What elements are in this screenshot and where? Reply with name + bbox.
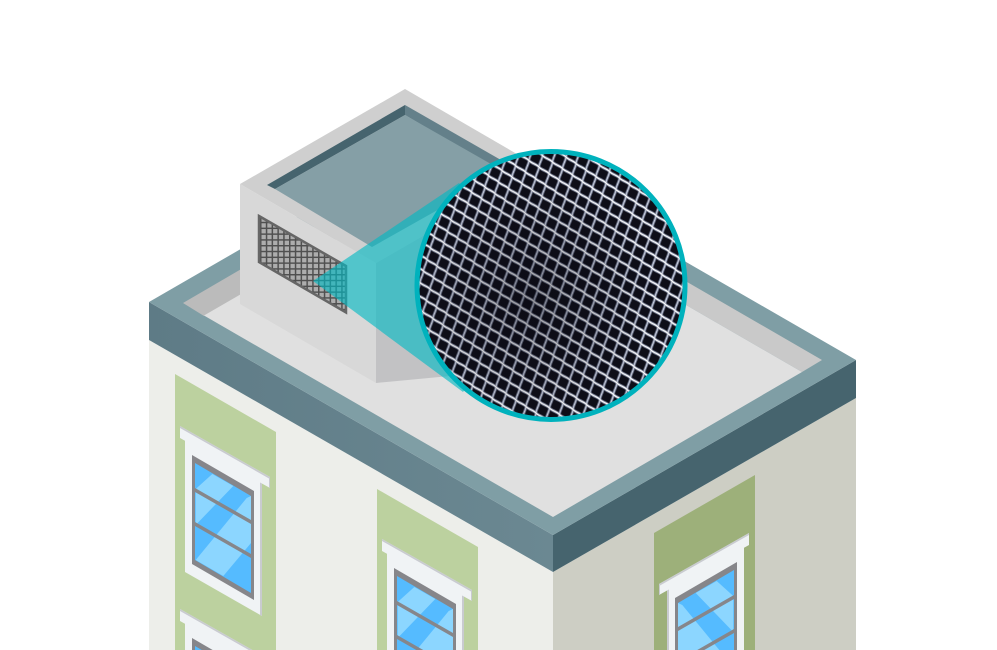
parapet: left face [149,302,553,572]
box: right face [376,168,541,383]
middle green panel [377,489,478,650]
magnifier beam [313,183,551,392]
mesh photo [417,152,685,420]
left green panel [175,374,276,650]
box: left face [240,184,376,383]
skylight: glass [275,115,505,247]
roof: inner wall, back right [452,146,822,372]
right wall [553,398,856,650]
skylight: dark inner wall [267,105,405,189]
parapet: top surface [149,127,856,535]
window: right [659,533,749,650]
vent grille [259,216,346,312]
magnified mesh circle [417,152,685,420]
window: left lower [180,609,270,650]
right green panel [654,475,755,650]
roof: floor [204,171,802,517]
parapet: right face [553,360,856,572]
window: left upper [180,426,270,616]
skylight: mid inner wall [405,105,515,174]
window: middle [382,539,472,650]
roof: inner wall, back left [183,146,454,316]
teal ring [417,152,685,420]
rooftop box [240,89,541,383]
box: top rim [240,89,541,263]
mesh shading [417,152,685,420]
left wall [149,340,553,650]
